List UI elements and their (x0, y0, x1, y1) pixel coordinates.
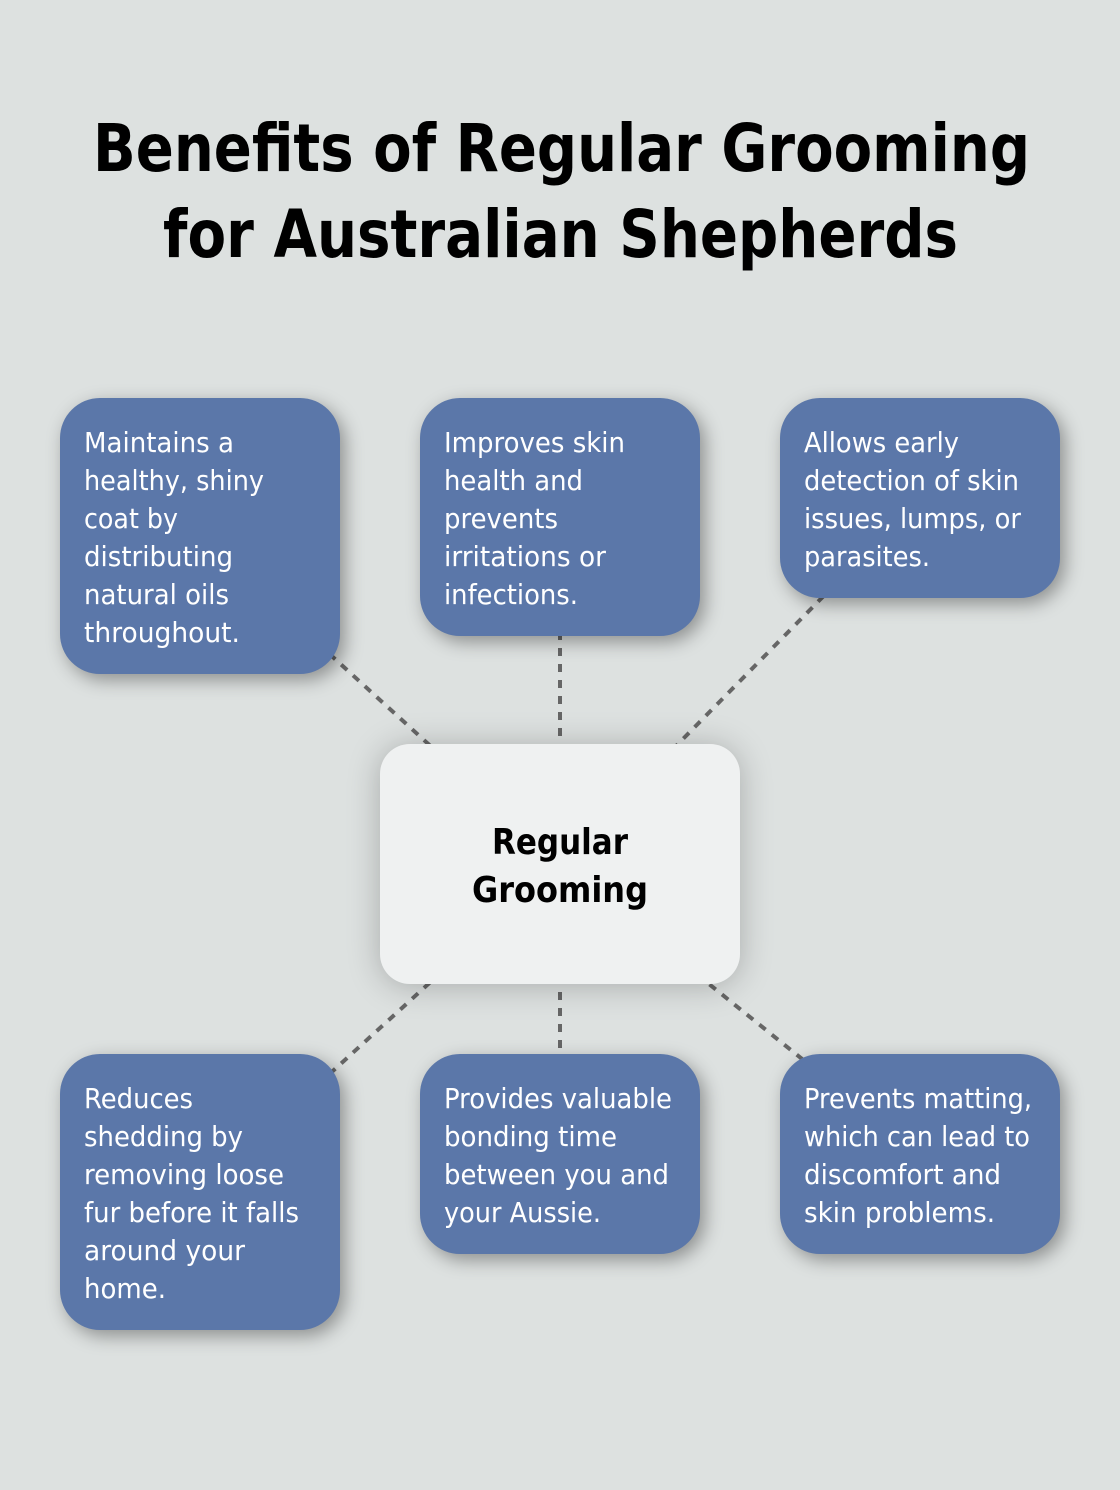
panel: shedding benefit: fur before it falls (84, 1197, 299, 1229)
panel: early detection benefit: parasites. (804, 541, 930, 573)
panel: shedding benefit: Reduces (84, 1083, 193, 1115)
panel: coat benefit: healthy, shiny (84, 465, 264, 497)
panel: skin health benefit (420, 398, 700, 636)
panel: bonding benefit: your Aussie. (444, 1197, 601, 1229)
panel: coat benefit: natural oils (84, 579, 229, 611)
panel: coat benefit: throughout. (84, 617, 240, 649)
panel: early detection benefit: Allows early (804, 427, 959, 459)
panel: shedding benefit: shedding by (84, 1121, 243, 1153)
panel: skin health benefit: health and (444, 465, 583, 497)
panel: shedding benefit: home. (84, 1273, 166, 1305)
panel: coat benefit: distributing (84, 541, 233, 573)
panel: matting benefit: skin problems. (804, 1197, 995, 1229)
panel: bonding benefit: bonding time (444, 1121, 617, 1153)
panel: skin health benefit: infections. (444, 579, 578, 611)
panel: skin health benefit: Improves skin (444, 427, 625, 459)
panel: coat benefit (60, 398, 340, 674)
panel: central node: Grooming (472, 870, 648, 911)
title (93, 110, 1030, 273)
panel: early detection benefit: issues, lumps, or (804, 503, 1022, 535)
panel: coat benefit: Maintains a (84, 427, 234, 459)
connector lines (200, 498, 920, 1192)
panel: matting benefit: discomfort and (804, 1159, 1001, 1191)
title: for Australian Shepherds (163, 196, 958, 273)
panel: shedding benefit: around your (84, 1235, 246, 1267)
panel: matting benefit: Prevents matting, (804, 1083, 1032, 1115)
panel: skin health benefit: prevents (444, 503, 558, 535)
panel: matting benefit (780, 1054, 1060, 1254)
panel: bonding benefit (420, 1054, 700, 1254)
panel: early detection benefit (780, 398, 1060, 598)
panel: skin health benefit: irritations or (444, 541, 607, 573)
panel: shedding benefit: removing loose (84, 1159, 284, 1191)
panel: bonding benefit: Provides valuable (444, 1083, 672, 1115)
panel: shedding benefit (60, 1054, 340, 1330)
panel: coat benefit: coat by (84, 503, 178, 535)
panel: early detection benefit: detection of skin (804, 465, 1019, 497)
panel: matting benefit: which can lead to (804, 1121, 1030, 1153)
panel: central node (380, 744, 740, 984)
panel: central node: Regular (492, 822, 628, 863)
panel: bonding benefit: between you and (444, 1159, 669, 1191)
